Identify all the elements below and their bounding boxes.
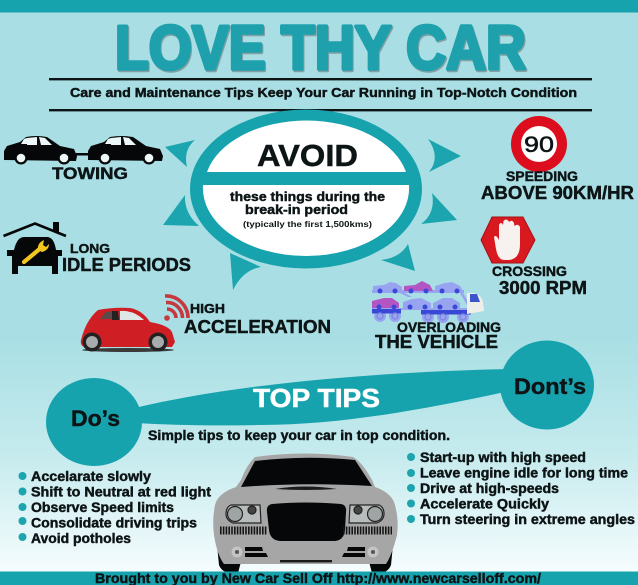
overloading label <box>375 320 501 352</box>
icon: garage with wrench <box>4 222 66 274</box>
icon: speed limit sign <box>511 116 567 172</box>
avoid description: these things during the <box>230 189 385 204</box>
do's list: Consolidate driving trips <box>31 516 197 530</box>
icon: speed limit sign: 90 <box>524 132 554 157</box>
header rule bottom <box>49 109 592 111</box>
top tips heading: TOP TIPS <box>253 383 380 413</box>
do's list: Avoid potholes <box>31 531 131 546</box>
avoid description: (typically the first 1,500kms) <box>243 220 372 229</box>
overloading label: OVERLOADING <box>397 320 501 335</box>
do's list: Shift to Neutral at red light <box>31 484 212 500</box>
speeding label <box>481 169 634 203</box>
do's list: Observe Speed limits <box>31 500 174 515</box>
dont's list: Leave engine idle for long time <box>420 466 629 480</box>
avoid ellipse <box>190 110 422 268</box>
dont's list: Accelerate Quickly <box>420 496 550 512</box>
top band <box>0 0 638 12</box>
idle periods label <box>62 241 191 275</box>
speeding label: SPEEDING <box>506 169 578 184</box>
acceleration label: HIGH <box>190 301 225 316</box>
speeding label: ABOVE 90KM/HR <box>481 183 634 203</box>
top tips banner <box>135 369 510 425</box>
avoid description <box>230 189 385 229</box>
acceleration label <box>184 301 331 337</box>
icon: red car <box>81 308 175 352</box>
crossing label: 3000 RPM <box>499 278 587 298</box>
icon: wifi signal <box>164 296 188 321</box>
title: LOVE THY CAR <box>115 14 526 83</box>
dont's circle: Dont’s <box>514 374 586 399</box>
dont's circle <box>500 340 594 430</box>
do's list: Accelarate slowly <box>31 469 152 484</box>
overloading label: THE VEHICLE <box>375 332 498 352</box>
icon: front view car <box>213 454 398 573</box>
avoid heading: AVOID <box>257 138 358 173</box>
dont's list: Start-up with high speed <box>420 450 586 465</box>
towing label: TOWING <box>52 164 128 183</box>
do's circle <box>46 378 142 466</box>
icon: towing cars <box>4 136 163 164</box>
icon: stop hand sign <box>481 217 535 263</box>
crossing label: CROSSING <box>492 264 567 279</box>
idle periods label: LONG <box>70 241 110 256</box>
dont's list: Turn steering in extreme angles <box>420 512 635 527</box>
do's list <box>18 469 212 546</box>
acceleration label: ACCELERATION <box>184 317 331 337</box>
arrows around ellipse <box>163 139 461 290</box>
title: LOVE THY CAR <box>116 16 527 84</box>
dont's list: Drive at high-speeds <box>420 481 559 496</box>
crossing label <box>492 264 587 298</box>
icon: car carrier truck <box>372 281 484 323</box>
dont's list <box>407 450 635 527</box>
idle periods label: IDLE PERIODS <box>62 255 191 275</box>
header rule top <box>49 78 592 80</box>
avoid description: break-in period <box>245 202 348 217</box>
tips intro text: Simple tips to keep your car in top condition. <box>148 428 450 443</box>
footer band <box>0 570 638 585</box>
do's circle: Do’s <box>71 406 120 431</box>
subtitle: Care and Maintenance Tips Keep Your Car Running in Top-Notch Condition <box>70 85 577 100</box>
